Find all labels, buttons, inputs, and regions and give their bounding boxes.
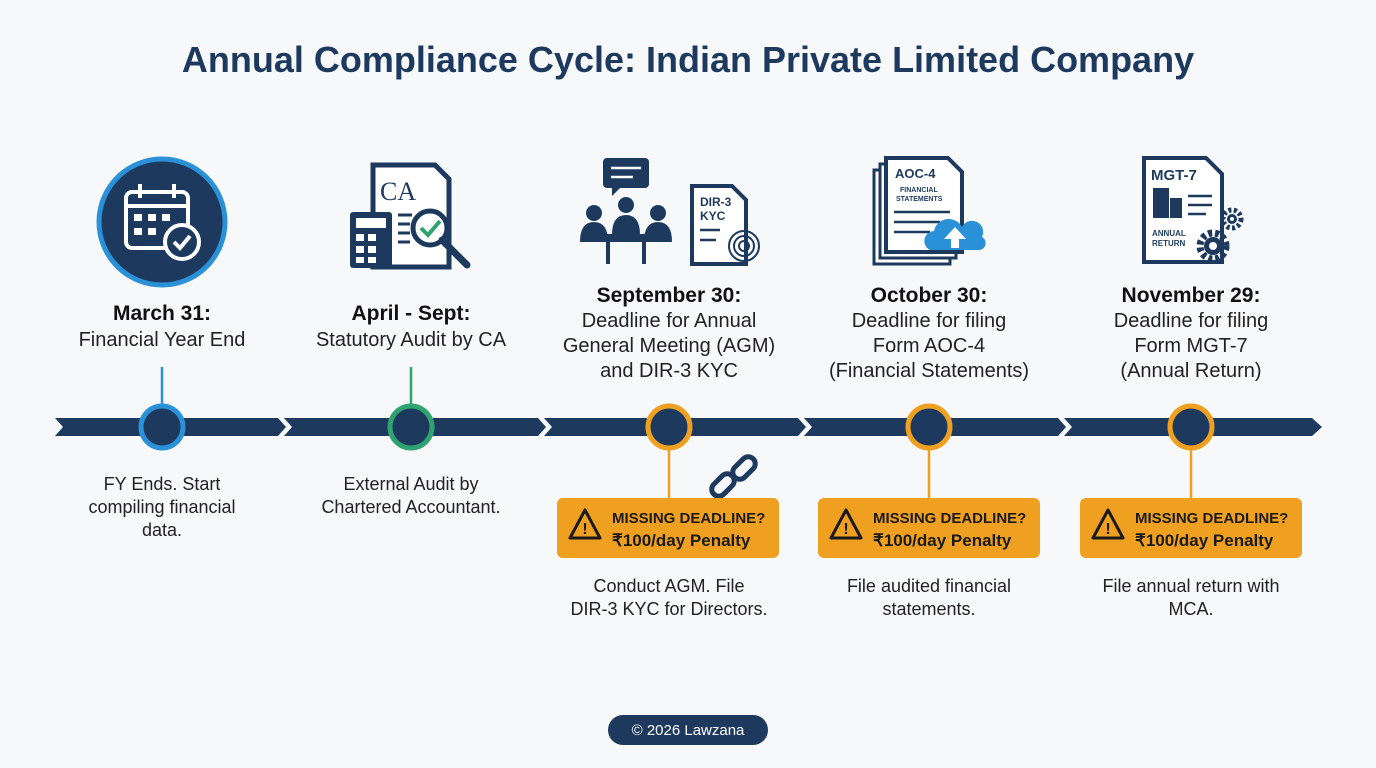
- step 2: April - Sept: [316, 165, 507, 517]
- step 4: October 30: [818, 158, 1040, 619]
- description: FY Ends. Start: [104, 474, 220, 494]
- description: Chartered Accountant.: [321, 497, 501, 517]
- heading: September 30:: [597, 284, 741, 307]
- heading: April - Sept:: [352, 302, 470, 325]
- description: data.: [142, 520, 182, 540]
- icon: AOC-4 document with cloud: FINANCIAL: [900, 187, 938, 194]
- step 1: March 31: [79, 159, 245, 540]
- node: [648, 406, 690, 448]
- icon: MGT-7 document with gears: RETURN: [1152, 239, 1186, 248]
- step 3: September 30: [557, 158, 779, 619]
- connector: [668, 449, 670, 498]
- step 1: March 31: Financial Year End: [79, 329, 245, 351]
- step 5: November 29: Deadline for filing: [1114, 310, 1268, 332]
- node: [141, 406, 183, 448]
- callout: penalty: !: [1105, 521, 1111, 538]
- icon: meeting and KYC: [580, 158, 759, 264]
- connector: [410, 367, 412, 405]
- step 3: September 30: General Meeting (AGM): [563, 335, 775, 357]
- callout: penalty: MISSING DEADLINE?: [1135, 510, 1288, 527]
- description: File annual return with: [1102, 576, 1280, 596]
- step 4: October 30: (Financial Statements): [829, 360, 1029, 382]
- icon: MGT-7 document with gears: MGT-7: [1151, 167, 1197, 184]
- callout: penalty: ₹100/day Penalty: [1135, 531, 1274, 550]
- callout: penalty: [557, 498, 779, 558]
- description: compiling financial: [88, 497, 236, 517]
- callout: penalty: !: [582, 521, 588, 538]
- step 3: September 30: and DIR-3 KYC: [600, 360, 738, 382]
- callout: penalty: ₹100/day Penalty: [612, 531, 751, 550]
- icon: MGT-7 document with gears: [1144, 158, 1241, 262]
- footer badge: © 2026 Lawzana: [632, 722, 745, 739]
- step 5: November 29: Form MGT-7: [1134, 335, 1248, 357]
- heading: October 30:: [871, 284, 987, 307]
- callout: penalty: [1080, 498, 1302, 558]
- step 5: November 29: (Annual Return): [1120, 360, 1262, 382]
- icon: AOC-4 document with cloud: AOC-4: [895, 166, 936, 181]
- title: Annual Compliance Cycle: Indian Private Limited Company: [182, 39, 1194, 80]
- connector: [928, 449, 930, 498]
- node: [1170, 406, 1212, 448]
- icon: meeting and KYC: DIR-3: [700, 195, 732, 209]
- connector: [161, 367, 163, 405]
- description: MCA.: [1168, 599, 1214, 619]
- icon: CA audit: CA: [380, 177, 416, 206]
- node: [390, 406, 432, 448]
- callout: penalty: [818, 498, 1040, 558]
- icon: CA audit: [350, 165, 467, 268]
- heading: March 31:: [113, 302, 211, 325]
- description: Conduct AGM. File: [593, 576, 745, 596]
- connector: [1190, 449, 1192, 498]
- callout: penalty: ₹100/day Penalty: [873, 531, 1012, 550]
- icon: meeting and KYC: KYC: [700, 209, 726, 223]
- step 4: October 30: Deadline for filing: [852, 310, 1006, 332]
- step 2: April - Sept: Statutory Audit by CA: [316, 329, 507, 351]
- footer badge: [608, 715, 768, 745]
- node: [908, 406, 950, 448]
- description: statements.: [882, 599, 976, 619]
- description: External Audit by: [343, 474, 479, 494]
- icon: calendar: [99, 159, 225, 285]
- heading: November 29:: [1122, 284, 1260, 307]
- callout: penalty: !: [843, 521, 849, 538]
- icon: broken chain: [709, 454, 758, 499]
- step 4: October 30: Form AOC-4: [873, 335, 985, 357]
- icon: MGT-7 document with gears: ANNUAL: [1152, 229, 1186, 238]
- step 3: September 30: Deadline for Annual: [582, 310, 756, 332]
- description: DIR-3 KYC for Directors.: [570, 599, 768, 619]
- icon: AOC-4 document with cloud: [874, 158, 986, 264]
- callout: penalty: MISSING DEADLINE?: [612, 510, 765, 527]
- step 5: November 29: [1080, 158, 1302, 619]
- callout: penalty: MISSING DEADLINE?: [873, 510, 1026, 527]
- timeline bar: [55, 418, 1322, 436]
- description: File audited financial: [847, 576, 1011, 596]
- icon: AOC-4 document with cloud: STATEMENTS: [896, 196, 943, 203]
